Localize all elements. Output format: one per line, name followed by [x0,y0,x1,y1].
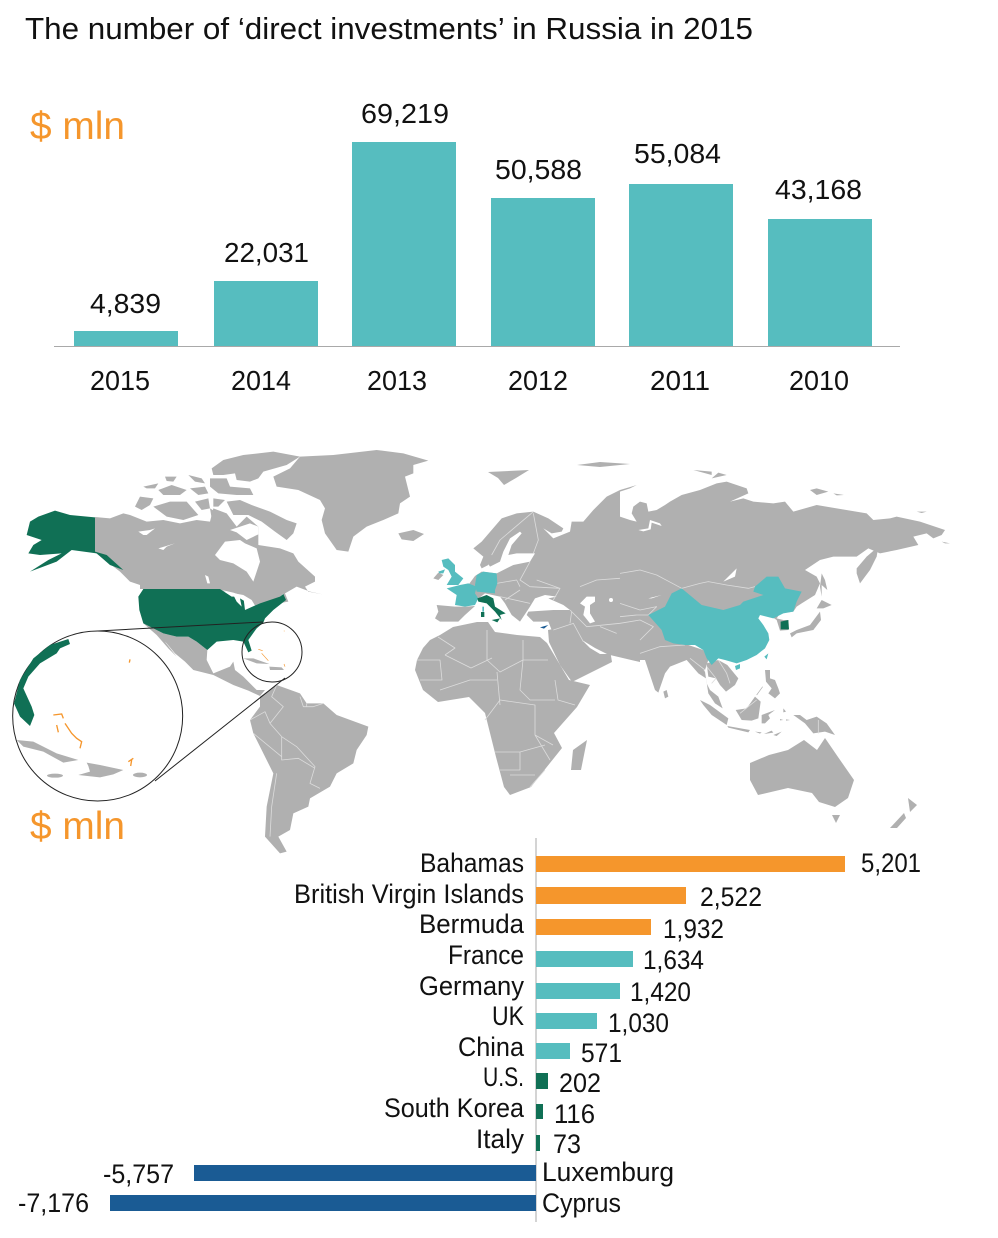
bar chart: investments by country: -5,757 [103,1159,174,1189]
bar chart: investments by country [18,838,921,1222]
bar chart: investments by country: China [458,1032,524,1062]
unit label: lower chart: $ mln [30,805,125,848]
bar chart: investments by country: 73 [553,1129,581,1159]
bar chart: investments by country: British Virgin Islands [294,879,524,909]
map: Svalbard and Franz Josef islands [488,462,630,485]
map: Italy [477,595,506,622]
inset: small locator circle [242,622,302,682]
bar chart: investments by country: Cyprus [542,1188,621,1218]
map: Russia, Central and East Asia [620,470,950,640]
world map [27,450,950,853]
bar chart: investments by country: 1,634 [643,945,704,975]
bar chart: investments by year: 22,031 [224,237,309,268]
map: Arabia and Iran coast [548,622,640,682]
bar chart: investments by year: 2013 [367,365,427,396]
map: Europe highlights [438,558,548,629]
map: Madagascar, Tasmania and New Zealand [571,740,917,828]
unit label: top chart: $ mln [30,105,125,148]
bar chart: investments by year: 69,219 [361,98,449,129]
bar chart: investments by country: 571 [581,1038,622,1068]
map: Greenland, Iceland and Americas land [143,450,428,853]
map: Alaska and contiguous US [27,511,286,652]
map: Bahamas and Bermuda on main map [258,631,285,667]
map: Canada and Arctic archipelago [95,452,323,608]
map: Europe, Scandinavia and Western Russia [433,490,620,653]
map: Caspian and Aral seas [580,597,613,623]
map: Cyprus [540,625,548,629]
bar chart: investments by country: Bermuda [419,909,524,939]
bar chart: investments by country: U.S. [483,1062,524,1092]
bar chart: investments by country: 1,932 [663,914,724,944]
bar chart: investments by year: 43,168 [775,174,862,205]
bar chart: investments by country: 2,522 [700,882,762,912]
bar chart: investments by country: Germany [419,971,525,1001]
bar chart: investments by country: Italy [476,1124,525,1154]
map: UK France Germany [438,558,497,612]
bar chart: investments by year: 2011 [650,365,710,396]
map: Australia [750,738,854,807]
bar chart: investments by country: Bahamas [420,848,524,878]
bar chart: investments by year: 50,588 [495,154,582,185]
bar chart: investments by year: 2012 [508,365,568,396]
bar chart: investments by country: South Korea [384,1093,524,1123]
bar chart: investments by year [54,98,900,396]
bar chart: investments by country: -7,176 [18,1188,89,1218]
bar chart: investments by country: Luxemburg [542,1157,674,1187]
bar chart: investments by country: 116 [554,1099,595,1129]
map: South and Southeast Asia [633,640,835,736]
bar chart: investments by year: 2010 [789,365,849,396]
inset: enlarged Caribbean circle [13,631,183,801]
title: The number of ‘direct investments’ in Russia in 2015 [25,11,753,46]
bar chart: investments by country: 5,201 [861,848,921,878]
map: Persian Gulf [582,640,607,654]
map: Africa [415,622,590,795]
inset: Caribbean zoom lines [98,622,285,781]
map: Hudson Bay and Canadian lakes [138,523,260,583]
bar chart: investments by year: 2014 [231,365,291,396]
map: Baikal, Balkhash and Ob gulf [638,520,737,598]
map: Great Lakes [222,590,248,607]
bar chart: investments by year: 4,839 [90,288,161,319]
bar chart: investments by year: 2015 [90,365,150,396]
map: China and South Korea [648,577,802,670]
map: country borders [250,512,818,837]
bar chart: investments by country: 202 [559,1068,601,1098]
bar chart: investments by country: 1,030 [608,1008,669,1038]
bar chart: investments by country: 1,420 [630,977,691,1007]
bar chart: investments by country: UK [492,1001,524,1031]
bar chart: investments by year: 55,084 [634,138,721,169]
bar chart: investments by country: France [448,940,524,970]
